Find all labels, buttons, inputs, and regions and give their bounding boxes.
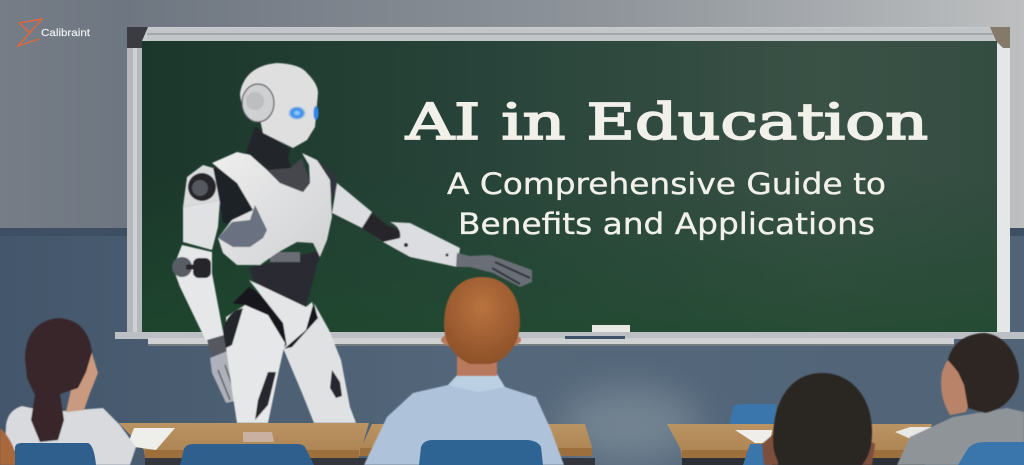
subtitle line 1: A Comprehensive Guide to	[447, 167, 886, 201]
hair	[773, 373, 872, 465]
collar	[448, 373, 505, 392]
green writing surface	[142, 41, 997, 332]
ears	[441, 330, 521, 350]
student: man with glasses	[897, 333, 1024, 465]
ears	[762, 432, 875, 465]
hair	[948, 333, 1019, 413]
chair centre left	[180, 444, 314, 465]
student: dark-haired foreground	[762, 373, 875, 465]
papers on desks	[127, 428, 175, 450]
board frame	[127, 27, 1010, 337]
shirt	[897, 408, 1024, 465]
robot teacher	[172, 63, 532, 423]
robot eye	[288, 106, 306, 120]
student: girl with ponytail	[0, 318, 136, 465]
face and neck	[66, 353, 98, 412]
shirt	[5, 406, 136, 465]
title: AI in Education: AI in Education	[405, 93, 928, 151]
logo wordmark: Calibraint	[41, 27, 90, 39]
icon: Z mark	[18, 19, 42, 46]
left desk	[119, 423, 369, 458]
robot extended arm	[316, 160, 532, 287]
subtitle	[447, 167, 886, 241]
chair: back row right	[730, 404, 776, 424]
right desk	[667, 424, 932, 458]
logo: Calibraint	[18, 19, 90, 46]
robot torso	[212, 152, 332, 265]
hair	[444, 277, 520, 364]
chalk tray	[115, 325, 1024, 346]
chair left	[15, 443, 96, 465]
face	[941, 350, 972, 415]
chairs in front of students	[15, 440, 1024, 465]
robot waist	[249, 250, 321, 308]
chair right	[958, 442, 1024, 465]
chair centre	[419, 440, 543, 465]
robot head	[240, 63, 318, 148]
student: boy in blue shirt	[364, 277, 564, 465]
subtitle line 2: Benefits and Applications	[458, 207, 875, 241]
small foreground head	[0, 428, 18, 465]
robot shoulder shadow	[213, 167, 253, 225]
chalkboard	[115, 27, 1024, 346]
robot hips and legs	[223, 280, 356, 423]
hair	[25, 318, 92, 442]
neck	[457, 354, 497, 376]
desks	[119, 423, 932, 465]
centre desk	[358, 424, 592, 456]
chair near dark-haired student	[743, 444, 772, 465]
robot near arm	[172, 165, 245, 403]
shirt	[364, 385, 564, 465]
robot neck	[245, 127, 304, 190]
